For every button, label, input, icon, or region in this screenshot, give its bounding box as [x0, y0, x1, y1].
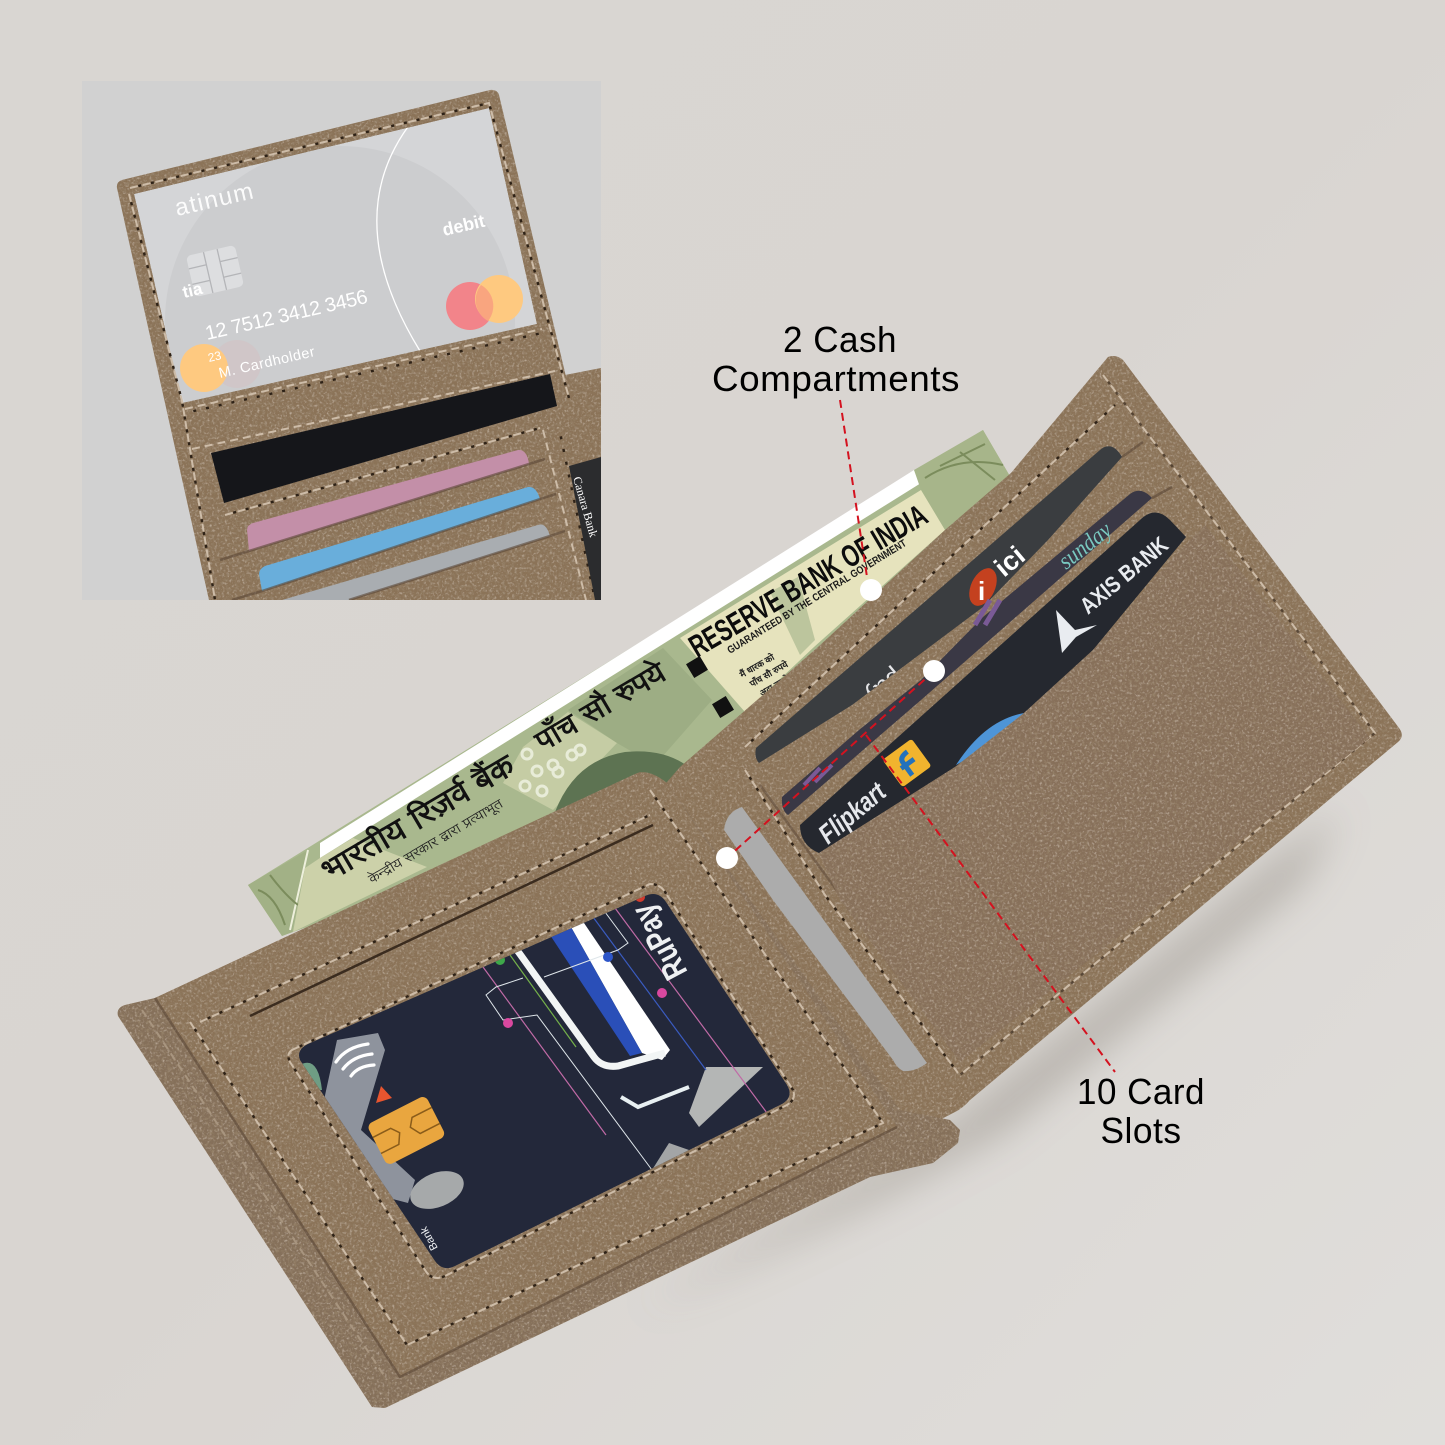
back layer with hinge tab	[118, 772, 960, 1408]
guarantee line: GUARANTEED BY THE CENTRAL GOVERNMENT	[725, 537, 909, 657]
purple card art	[804, 600, 1000, 785]
right wallet wing	[566, 368, 601, 402]
light pattern panel	[503, 712, 617, 810]
flipkart icon	[882, 739, 932, 787]
promise lines: मैं धारक को	[737, 651, 777, 680]
anchor dot lower	[716, 847, 738, 869]
top stitch row	[745, 405, 1115, 747]
navy axis card	[800, 512, 1186, 853]
black marks	[686, 656, 734, 718]
right panel leather	[650, 356, 1402, 1130]
hindi amount: पाँच सौ रुपये	[527, 652, 677, 765]
cream band left	[293, 838, 427, 932]
leather band stitching	[185, 329, 555, 449]
promise lines	[737, 644, 801, 703]
inset background	[82, 81, 601, 600]
label: Compartments	[712, 358, 960, 399]
hindi subtitle: केन्द्रीय सरकार द्वारा प्रत्याभूत	[364, 794, 508, 891]
white strip	[320, 470, 921, 858]
wallet right panel	[650, 356, 1402, 1130]
id window with rupay card	[290, 885, 800, 1280]
gutter stitching	[745, 770, 958, 1073]
anchor dot upper	[923, 660, 945, 682]
side divider stitching	[543, 428, 595, 600]
note pocket slit	[250, 825, 653, 1016]
mastercard logo	[446, 282, 489, 330]
window stitching	[129, 103, 569, 600]
blue card	[259, 487, 540, 591]
hindi title: भारतीय रिज़र्व बैंक	[314, 744, 526, 896]
blue art	[956, 713, 1024, 765]
outer edge stitch row	[960, 375, 1375, 1075]
card text: 23	[207, 348, 223, 365]
leader line to gutter	[727, 671, 934, 858]
grey card	[282, 524, 550, 600]
card text	[172, 177, 487, 382]
wallet left panel	[118, 772, 960, 1408]
axis bank text: AXIS BANK	[1075, 531, 1173, 619]
sunday text: sunday	[1054, 517, 1117, 575]
flap top stitching	[200, 815, 650, 1022]
card text: atinum	[172, 177, 257, 222]
pocket edge lines	[220, 459, 565, 600]
label: Slots	[1100, 1110, 1182, 1151]
train graphic	[571, 923, 670, 1060]
grey card in gutter	[724, 807, 927, 1071]
front flap fold edge	[155, 998, 897, 1377]
id window frame stitching	[288, 884, 794, 1278]
flap edge stitching	[190, 790, 883, 1345]
banknote	[248, 430, 1011, 936]
ICICI logo: pay	[859, 663, 910, 713]
translucent patches	[324, 1033, 415, 1203]
contactless icon	[336, 1044, 374, 1076]
ICICI logo	[866, 544, 1026, 694]
reserve bank title: RESERVE BANK OF INDIA	[683, 497, 933, 664]
callout: 2 cash compartments	[712, 319, 960, 601]
front flap leather	[155, 772, 897, 1377]
charcoal card	[755, 446, 1122, 763]
card text: debit	[440, 211, 487, 240]
flipkart text: Flipkart	[813, 776, 892, 850]
pink card	[247, 450, 529, 551]
indicator triangle	[376, 1086, 392, 1103]
pins	[495, 892, 667, 1028]
panel: inset close-up of clear card window	[82, 81, 601, 600]
bank name: Bank	[418, 1224, 441, 1252]
transparent card window	[134, 108, 537, 402]
promise lines: अदा करने का	[757, 666, 801, 698]
green corner bottom left	[248, 850, 308, 936]
card text: tia	[181, 279, 205, 302]
purple card	[782, 491, 1152, 815]
leader line to label	[866, 735, 1115, 1072]
portrait	[555, 751, 690, 815]
slot tier lines	[760, 442, 1172, 1060]
note paper	[248, 430, 1011, 936]
cream panel right	[680, 490, 945, 712]
mirrored logo	[213, 340, 261, 388]
card text: M. Cardholder	[217, 344, 317, 382]
front pocket	[819, 525, 1370, 1062]
rupay text: RuPay	[624, 898, 694, 986]
back layer stitching	[142, 1010, 387, 1380]
pocket stitches	[225, 428, 540, 515]
green corner top right	[914, 430, 1011, 530]
anchor dot	[860, 579, 882, 601]
black bank card	[569, 457, 601, 600]
black lining	[211, 374, 557, 503]
ICICI logo: i	[978, 576, 985, 606]
axis logo	[1056, 610, 1097, 653]
ICICI logo: ici	[989, 540, 1031, 583]
lines	[483, 967, 606, 1135]
chip	[186, 245, 244, 297]
seal dots	[520, 745, 585, 796]
card text: 12 7512 3412 3456	[203, 286, 370, 345]
label: 10 Card	[1077, 1071, 1205, 1112]
leather flap	[117, 90, 601, 600]
callout: 10 card slots	[716, 660, 1205, 1151]
promise lines: पाँच सौ रुपये	[747, 658, 790, 689]
bank card text: Canara Bank	[570, 475, 601, 539]
chip	[366, 1095, 446, 1166]
drop shadow under wallet	[640, 810, 1340, 1310]
label: 2 Cash	[783, 319, 897, 360]
leader line	[840, 400, 869, 590]
